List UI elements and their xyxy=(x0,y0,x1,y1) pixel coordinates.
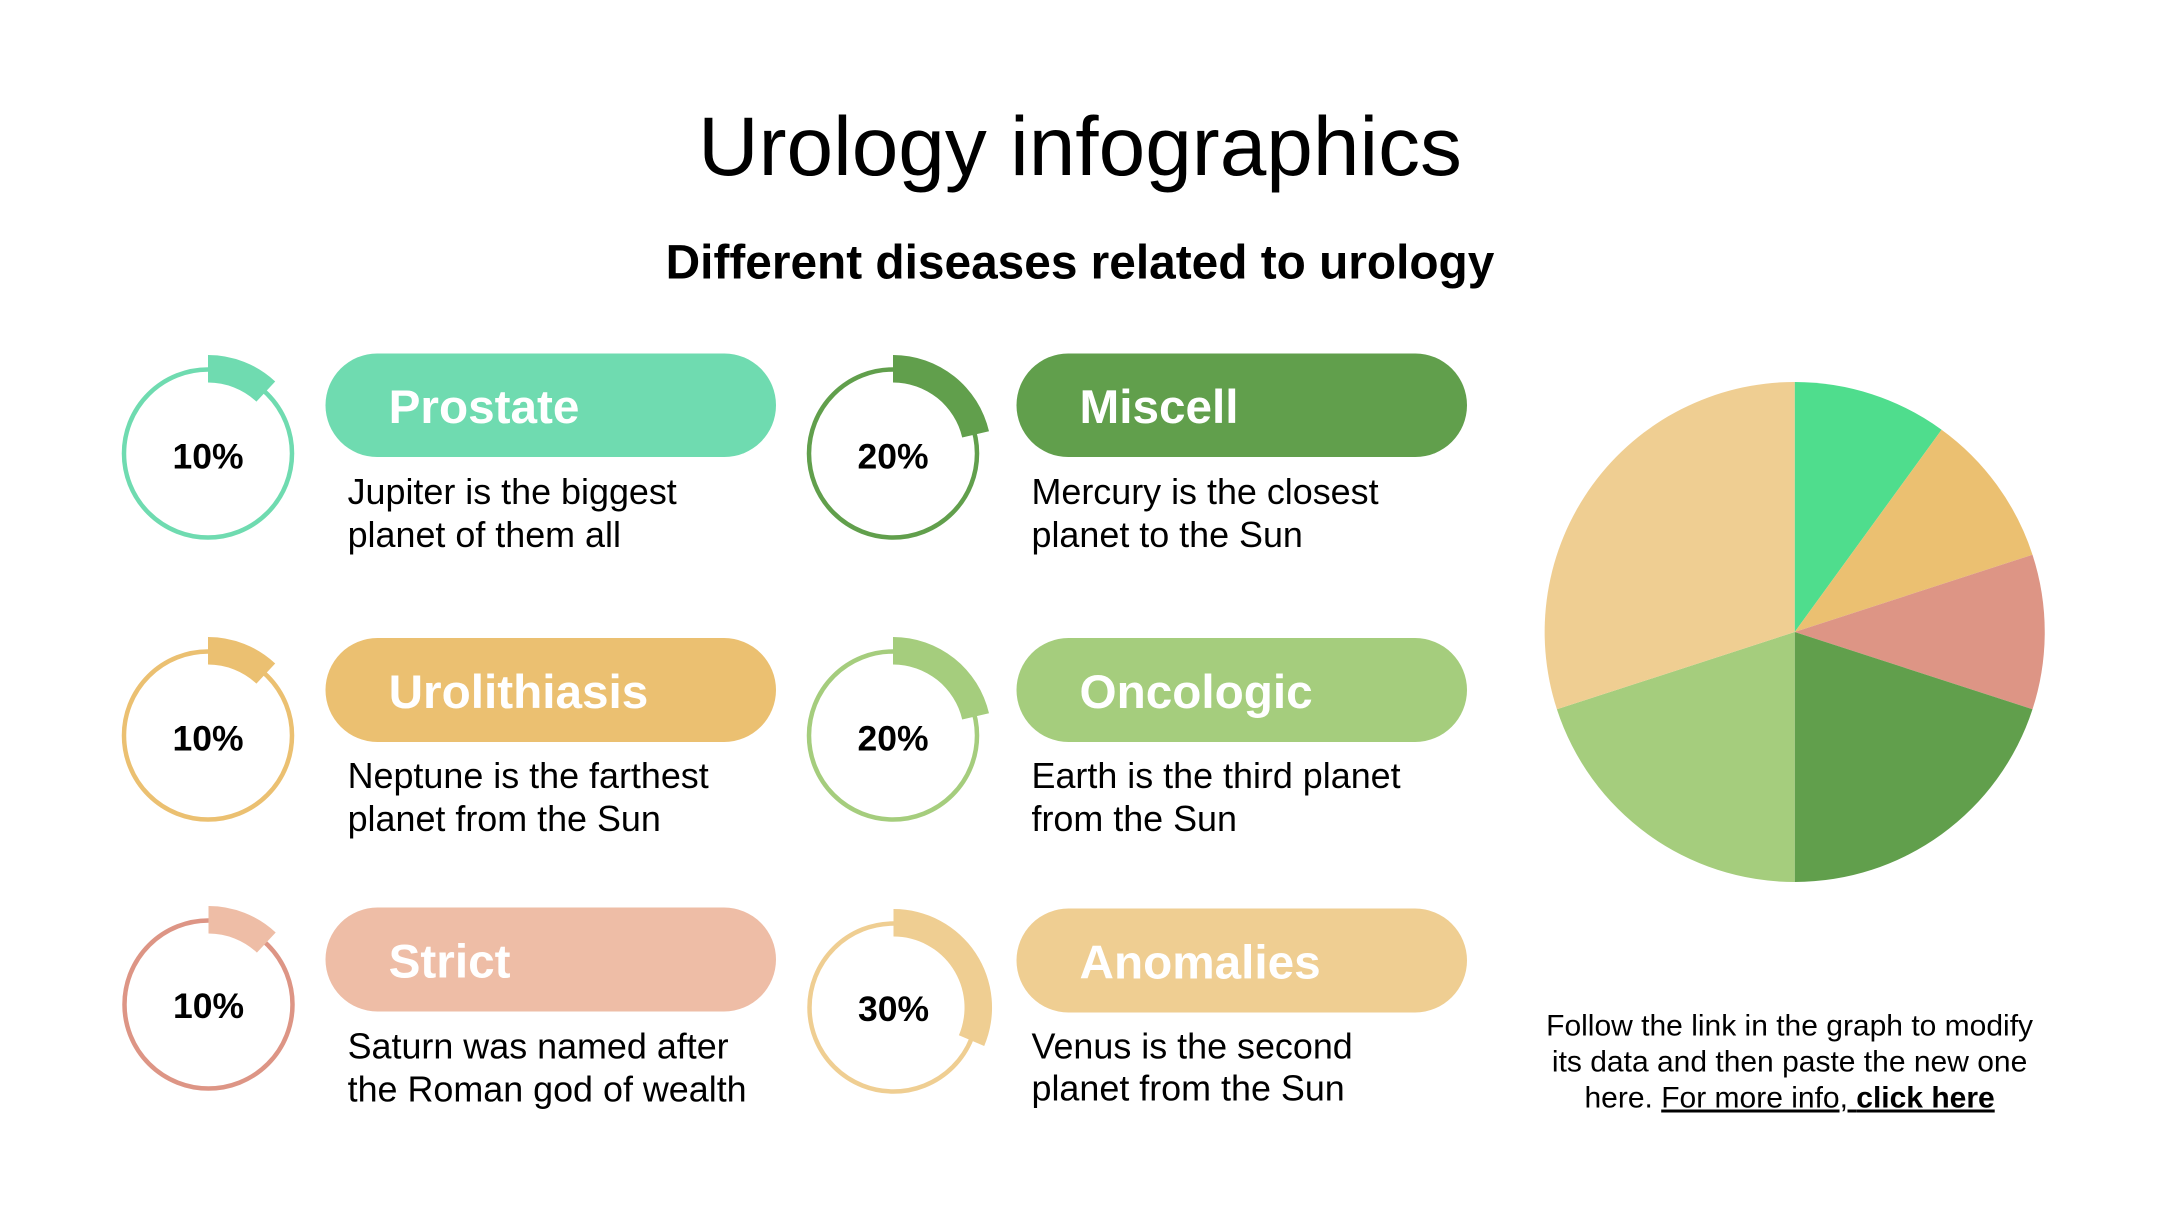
gauge: Strict 10%: 10% xyxy=(173,986,244,1026)
pill: Prostate: Prostate xyxy=(389,381,579,434)
gauge: Miscell 20% xyxy=(809,355,989,538)
subtitle: Different diseases related to urology xyxy=(666,237,1495,290)
gauge: Anomalies 30% xyxy=(810,909,992,1092)
description: Anomalies: planet from the Sun xyxy=(1032,1068,1345,1108)
panel: Urolithiasis xyxy=(124,637,776,839)
gauge: Anomalies 30%: 30% xyxy=(858,989,929,1029)
description: Strict: Saturn was named after xyxy=(348,1026,729,1066)
description: Miscell: planet to the Sun xyxy=(1032,515,1303,555)
pill: Anomalies: Anomalies xyxy=(1080,936,1321,990)
pill: Miscell: Miscell xyxy=(1080,381,1239,434)
pill: Urolithiasis: Urolithiasis xyxy=(389,666,648,719)
pill: Urolithiasis xyxy=(326,638,776,742)
description: Anomalies: Venus is the second xyxy=(1032,1026,1353,1066)
gauge: Oncologic 20%: 20% xyxy=(857,718,929,758)
gauge: Urolithiasis 10% xyxy=(124,637,292,820)
pill: Strict: Strict xyxy=(389,936,511,988)
pill: Prostate xyxy=(326,354,776,457)
description: Urolithiasis: planet from the Sun xyxy=(348,799,661,839)
panel: Strict xyxy=(124,906,776,1110)
gauge: Urolithiasis 10%: 10% xyxy=(172,718,244,758)
pill: Oncologic xyxy=(1016,638,1467,742)
footnote text: its data and then paste the new one xyxy=(1552,1046,2027,1078)
gauge: Miscell 20%: 20% xyxy=(857,436,929,476)
panel: Oncologic xyxy=(809,637,1467,839)
gauge: Prostate 10% xyxy=(124,355,292,538)
pill: Miscell xyxy=(1016,354,1467,457)
footnote text: Follow the link in the graph to modify xyxy=(1546,1010,2033,1042)
panel: Prostate xyxy=(124,354,776,555)
title: Urology infographics xyxy=(698,99,1462,193)
gauge: Strict 10% xyxy=(124,906,292,1088)
panel: Anomalies xyxy=(810,908,1467,1108)
pill: Oncologic: Oncologic xyxy=(1080,666,1313,719)
gauge: Oncologic 20% xyxy=(809,637,989,820)
pill: Strict xyxy=(326,908,776,1012)
description: Miscell: Mercury is the closest xyxy=(1032,472,1379,512)
description: Oncologic: Earth is the third planet xyxy=(1032,756,1401,796)
description: Urolithiasis: Neptune is the farthest xyxy=(348,756,709,796)
description: Oncologic: from the Sun xyxy=(1032,799,1237,839)
description: Strict: the Roman god of wealth xyxy=(348,1070,747,1110)
footnote text: here. For more info, click here xyxy=(1584,1082,1995,1114)
pie chart xyxy=(1545,382,2045,882)
gauge: Prostate 10%: 10% xyxy=(172,436,244,476)
description: Prostate: planet of them all xyxy=(348,515,621,555)
description: Prostate: Jupiter is the biggest xyxy=(348,472,677,512)
pill: Anomalies xyxy=(1016,908,1467,1012)
panel: Miscell xyxy=(809,354,1467,555)
